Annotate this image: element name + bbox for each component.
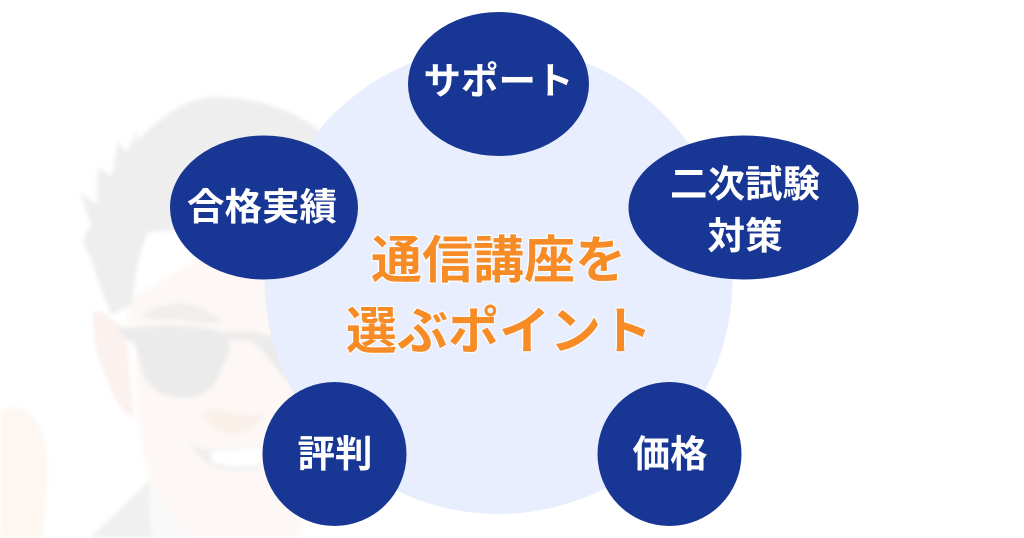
node: 二次試験対策: 二次試験 xyxy=(670,163,820,205)
node: 二次試験対策 xyxy=(628,136,858,280)
node: 二次試験対策: 対策 xyxy=(708,215,782,257)
node: 価格 xyxy=(598,382,742,526)
node: サポート xyxy=(408,12,589,156)
central title: 通信講座を xyxy=(371,232,626,289)
faded background portrait of man with sunglasses xyxy=(0,97,330,538)
node: 合格実績 xyxy=(170,136,358,280)
central title: 選ぶポイント xyxy=(346,303,652,360)
node: 評判: 評判 xyxy=(298,433,372,475)
large pale blue central circle xyxy=(264,46,732,514)
central title xyxy=(346,232,652,360)
node: サポート: サポート xyxy=(424,60,574,102)
node: 評判 xyxy=(262,382,406,526)
node: 合格実績: 合格実績 xyxy=(187,186,337,228)
node: 価格: 価格 xyxy=(632,433,708,475)
